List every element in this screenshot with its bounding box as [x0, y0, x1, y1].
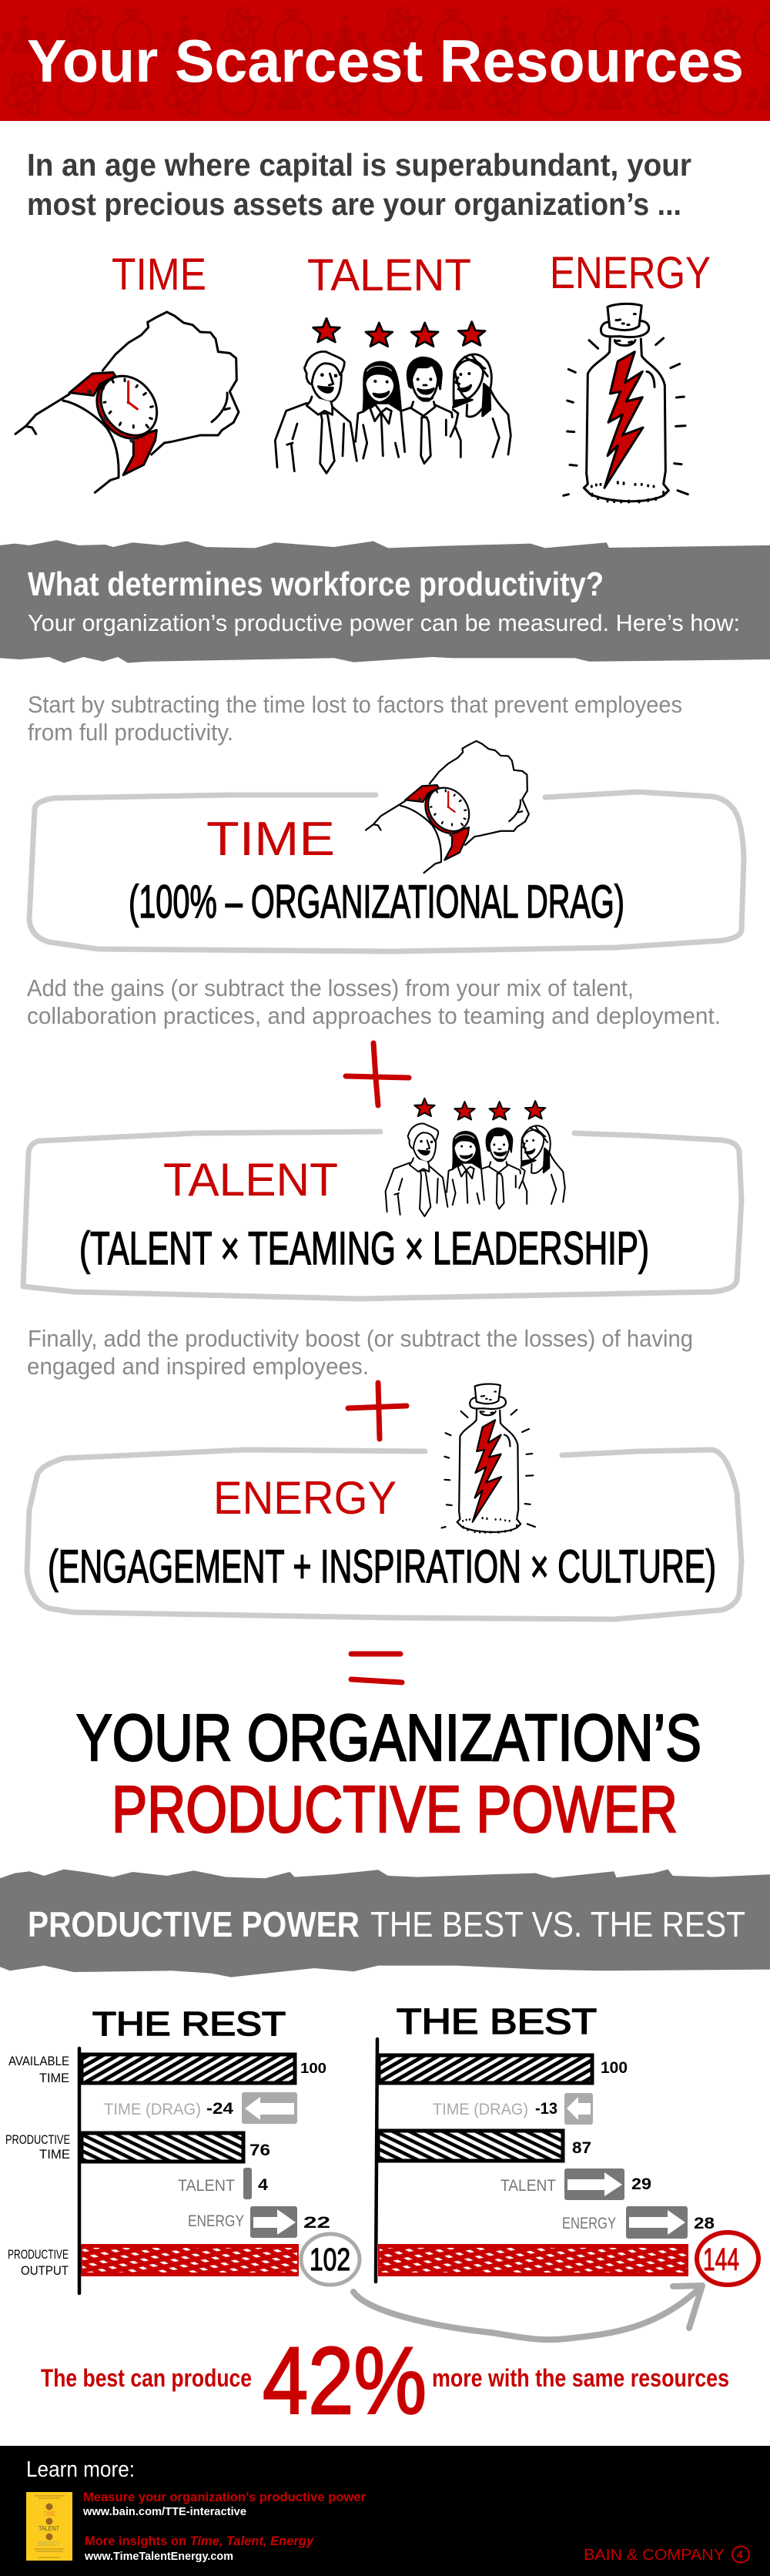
- chart: the rest: [5, 2005, 360, 2293]
- bar: available time 100: [82, 2054, 326, 2083]
- icon: energy bottle: [564, 304, 688, 502]
- panel: time formula box: [29, 741, 744, 951]
- text block: time step: Start by subtracting the time lost to factors that prevent employees: [28, 691, 682, 718]
- text block: time step: [28, 691, 682, 746]
- arrow: talent 29: [500, 2168, 651, 2200]
- icon: talent team with stars: [275, 318, 511, 473]
- icon: red plus 2: [348, 1383, 407, 1439]
- bar: available time 100: [379, 2055, 628, 2083]
- row labels: TIME: [39, 2071, 69, 2085]
- link text: measure: Measure your organization’s productive power: [83, 2490, 366, 2504]
- row labels: TIME: [39, 2147, 70, 2162]
- arrow: talent 29: TALENT: [500, 2177, 556, 2195]
- link text: insights: [84, 2534, 314, 2563]
- bar: available time 100: 100: [601, 2059, 628, 2077]
- bar: productive time 76: 76: [249, 2142, 270, 2159]
- panel: footer: [0, 2446, 770, 2576]
- arrow: time drag -24: TIME (DRAG): [104, 2101, 201, 2118]
- text block: energy step: Finally, add the productivity boost (or subtract the losses) of having: [28, 1325, 693, 1352]
- row labels: OUTPUT: [21, 2263, 69, 2278]
- arrow: energy 28: ENERGY: [562, 2215, 616, 2232]
- logo: Bain and Company: 4: [737, 2548, 743, 2561]
- link text: measure: www.bain.com/TTE-interactive: [82, 2505, 246, 2518]
- arrow: energy 28: [562, 2206, 715, 2239]
- icon: red equals sign: [351, 1654, 402, 1682]
- link text: measure: [82, 2490, 366, 2518]
- arrow: time drag -13: [433, 2093, 593, 2125]
- formula label: TALENT: TALENT: [163, 1154, 338, 1206]
- panel: energy formula box: [27, 1384, 742, 1619]
- bar: productive time 87: 87: [572, 2139, 591, 2157]
- callout: 42 percent statement: The best can produce: [41, 2364, 252, 2392]
- arrow: time drag -13: -13: [535, 2100, 557, 2118]
- row labels: PRODUCTIVE: [8, 2247, 69, 2262]
- panel: best vs rest band: [0, 1870, 770, 1977]
- bar: productive output: [81, 2244, 299, 2276]
- intro text: most precious assets are your organization’s ...: [27, 186, 681, 222]
- row labels: PRODUCTIVE: [5, 2132, 70, 2147]
- heading: ENERGY: ENERGY: [550, 248, 711, 298]
- formula label: TIME: TIME: [206, 813, 335, 866]
- icon: book cover: TIME: [43, 2511, 55, 2517]
- band heading bold: PRODUCTIVE POWER: [28, 1904, 360, 1944]
- callout: 42 percent statement: 42%: [263, 2329, 427, 2434]
- icon: book cover: [26, 2492, 72, 2561]
- callout: 144: [697, 2232, 758, 2285]
- bar: talent 4: 4: [258, 2176, 268, 2194]
- row labels: AVAILABLE: [8, 2054, 69, 2068]
- logo: Bain and Company: BAIN & COMPANY: [584, 2547, 725, 2564]
- callout: 102: [301, 2234, 360, 2285]
- band subheading: Your organization’s productive power can be measured. Here’s how:: [28, 609, 740, 636]
- bar: productive time 87: [378, 2131, 591, 2161]
- band heading: What determines workforce productivity?: [28, 565, 604, 603]
- arrow: energy 22: [188, 2206, 330, 2238]
- icon: bottle small: [442, 1384, 535, 1533]
- text block: time step: from full productivity.: [28, 719, 233, 746]
- bar: talent 4: TALENT: [178, 2177, 235, 2195]
- arrow: curved comparison arrow: [353, 2286, 702, 2340]
- chart: the best: [376, 2001, 758, 2285]
- arrow: time drag -13: TIME (DRAG): [433, 2101, 528, 2118]
- result heading: [76, 1702, 701, 1846]
- link text: insights: More insights on Time, Talent, Energy: [85, 2534, 314, 2548]
- arrow: talent 29: 29: [631, 2175, 651, 2193]
- icon: team small: [386, 1098, 565, 1216]
- bar: productive output: [378, 2244, 688, 2276]
- icon: hand with wristwatch: [15, 312, 239, 492]
- icon: book cover: ENERGY: [38, 2541, 61, 2547]
- panel: workforce productivity band: [0, 540, 770, 663]
- text block: energy step: [27, 1325, 693, 1380]
- panel: talent formula box: [23, 1098, 742, 1299]
- arrow: time drag -24: -24: [206, 2100, 233, 2118]
- intro text: In an age where capital is superabundant, your: [27, 147, 691, 183]
- bar: available time 100: 100: [300, 2061, 326, 2076]
- icon: book cover: TALENT: [38, 2525, 59, 2532]
- callout: 144: 144: [703, 2242, 739, 2277]
- row labels: [5, 2054, 70, 2278]
- icon: hand with watch small: [366, 741, 529, 873]
- arrow: energy 28: 28: [694, 2215, 715, 2232]
- chart title: THE REST: [92, 2005, 286, 2043]
- arrow: energy 22: 22: [303, 2214, 330, 2232]
- title: Your Scarcest Resources: [27, 27, 744, 95]
- header banner: [0, 0, 770, 121]
- text block: talent step: collaboration practices, and approaches to teaming and deployment.: [27, 1002, 721, 1029]
- formula label: ENERGY: ENERGY: [213, 1472, 397, 1524]
- link text: insights: www.TimeTalentEnergy.com: [84, 2550, 233, 2563]
- callout: 102: 102: [310, 2242, 350, 2277]
- bar: productive time 76: [82, 2133, 270, 2162]
- text block: talent step: Add the gains (or subtract the losses) from your mix of talent,: [27, 974, 634, 1001]
- arrow: time drag -24: [104, 2092, 297, 2124]
- icon: red plus 1: [346, 1043, 409, 1105]
- footer heading: Learn more:: [26, 2457, 135, 2482]
- arrow: energy 22: ENERGY: [188, 2212, 244, 2230]
- bar: talent 4: [178, 2168, 268, 2199]
- chart title: THE BEST: [397, 2001, 597, 2041]
- text block: energy step: engaged and inspired employees.: [27, 1353, 369, 1380]
- text block: talent step: [27, 974, 721, 1029]
- heading: TIME: TIME: [112, 250, 206, 300]
- intro text: [27, 147, 691, 222]
- callout: 42 percent statement: [41, 2329, 729, 2434]
- heading: TALENT: TALENT: [307, 250, 471, 300]
